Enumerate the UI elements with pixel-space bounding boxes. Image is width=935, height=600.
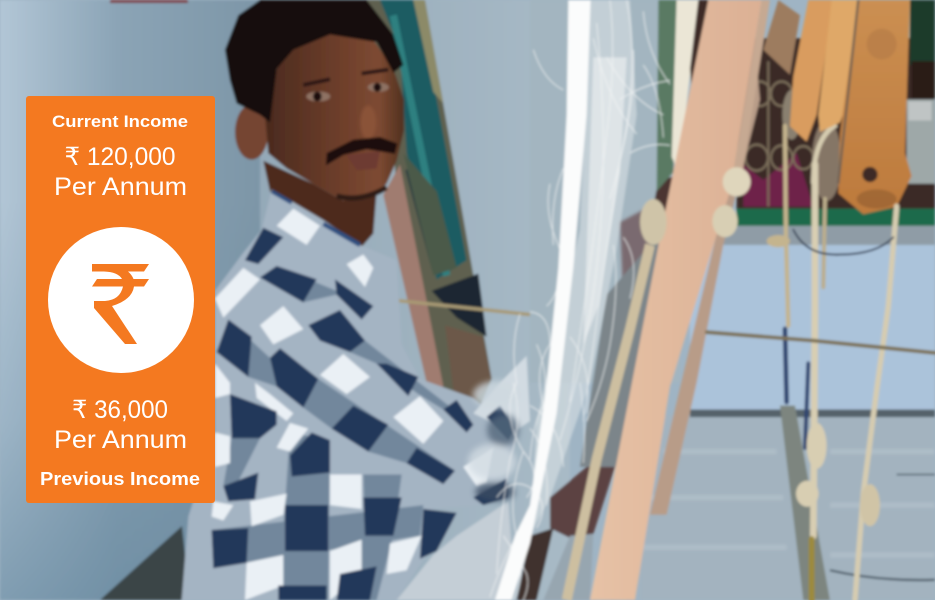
- left iris: [313, 91, 322, 101]
- threads haze: [530, 0, 637, 536]
- dark bottom-left corner: [517, 528, 553, 600]
- dark cloth at top of loom: [653, 176, 677, 214]
- chin stubble: [337, 188, 387, 198]
- thick white yarn bundle: [495, 0, 591, 600]
- centre wall: [260, 0, 570, 600]
- green strip and white fibre: [657, 0, 678, 191]
- right iris: [373, 83, 381, 92]
- maroon shadow behind threads: [620, 199, 663, 306]
- wall behind threads: [530, 0, 680, 383]
- thin thread lines: [490, 0, 670, 600]
- hair: [225, 0, 403, 122]
- moustache: [326, 137, 397, 165]
- rope knots: [807, 423, 827, 469]
- white yarn threads over the man: [490, 0, 670, 600]
- white plaid patches: [212, 209, 493, 600]
- loom floor beam: [780, 406, 830, 600]
- middle pulley arm: [818, 0, 860, 132]
- grey gap beside the beam: [580, 230, 663, 467]
- previous income amount: ₹ 36,000: [72, 396, 168, 424]
- neck: [263, 161, 377, 249]
- top cross timber: [763, 0, 800, 75]
- current income amount: ₹ 120,000: [64, 143, 176, 171]
- wall shading lower left: [0, 200, 260, 600]
- eyebrows: [303, 70, 388, 85]
- window with grille: [737, 38, 935, 210]
- side beam: [650, 65, 760, 515]
- current income period: Per Annum: [54, 173, 187, 201]
- lap: [397, 501, 513, 600]
- weaver's hand and sleeve cuff, blurred: [468, 381, 521, 501]
- loom cloth behind the man: [363, 0, 530, 408]
- pulley wheels: [782, 90, 801, 140]
- nose highlight: [360, 105, 376, 140]
- floor warp threads: [640, 415, 935, 600]
- grey ledge: [723, 226, 935, 245]
- main pulley arm: [838, 0, 912, 214]
- brown stool shape: [550, 467, 615, 540]
- right section of the photo: loom: [517, 0, 935, 600]
- wall behind loom: [690, 226, 935, 417]
- upper bright threads: [583, 57, 627, 344]
- blue collar stripe: [323, 224, 360, 245]
- dark navy plaid patches: [212, 228, 515, 600]
- orange income panel: [26, 96, 215, 503]
- skirting at lower left: [100, 526, 190, 600]
- red object at top left: [110, 0, 188, 3]
- green sill: [737, 209, 935, 226]
- face: [265, 33, 404, 201]
- panel background: [26, 96, 215, 503]
- heading: current income: Current Income: [52, 112, 188, 131]
- shirt base: [182, 189, 517, 600]
- icon: rupee in white circle: [48, 227, 194, 373]
- rope in front of grey gap: [567, 245, 650, 600]
- heading: previous income: Previous Income: [40, 469, 200, 489]
- main beam: [590, 0, 762, 600]
- blue collar stripe, left: [272, 191, 292, 203]
- ear: [235, 104, 268, 160]
- hand blur: [473, 356, 530, 432]
- left pulley arm: [790, 0, 833, 142]
- grey-blue lower gap: [543, 534, 593, 600]
- left wall: [0, 0, 260, 600]
- ropes: [707, 126, 935, 600]
- right eye white: [368, 83, 389, 92]
- previous income period: Per Annum: [54, 426, 187, 454]
- lamp: [907, 100, 935, 184]
- medium plaid bands: [212, 266, 473, 600]
- left eye white: [306, 91, 330, 101]
- man: shirt, face and hair: [182, 0, 530, 600]
- lips: [347, 151, 380, 170]
- cotton tufts: [723, 167, 751, 196]
